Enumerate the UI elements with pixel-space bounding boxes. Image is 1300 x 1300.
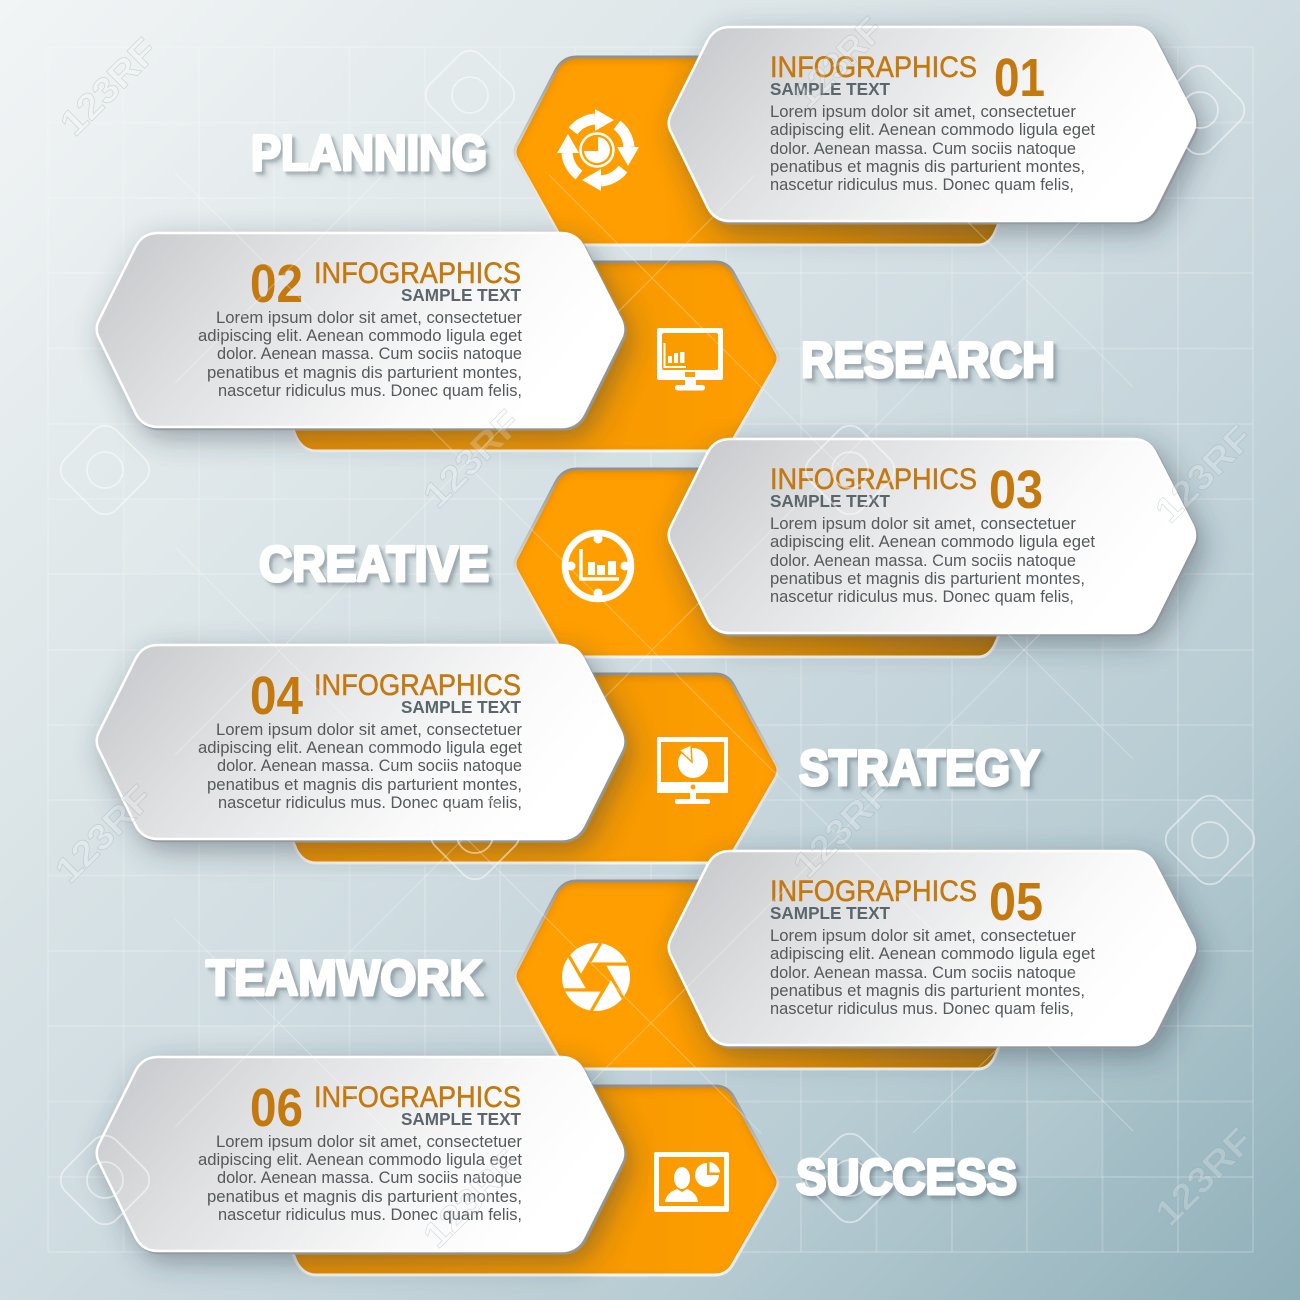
orange tab 5 [515,881,1000,1069]
heading 4: 04 [250,666,303,726]
text block 6: adipiscing elit. Aenean commodo ligula eget [198,1151,522,1169]
step 5: teamwork [206,851,1195,1069]
heading 4 [250,666,521,726]
heading 3: SAMPLE TEXT [770,491,890,511]
text block 3: nascetur ridiculus mus. Donec quam felis, [770,588,1074,606]
heading 5: INFOGRAPHICS [770,875,977,908]
watermark overlay: 123RF [52,30,166,144]
watermark overlay: 123RF [415,402,529,516]
text block 4: dolor. Aenean massa. Cum sociis natoque [217,757,522,775]
step 3: creative [259,439,1195,657]
text block 3: penatibus et magnis dis parturient montes, [770,570,1085,588]
text block 6: nascetur ridiculus mus. Donec quam felis, [218,1206,522,1224]
heading 3: 03 [989,460,1043,520]
text block 5: dolor. Aenean massa. Cum sociis natoque [770,964,1076,982]
heading 2 [250,254,521,314]
orange tab 4 [285,674,778,863]
step 1: planning [251,27,1195,245]
heading 4: INFOGRAPHICS [314,669,521,702]
text block 6 [198,1133,523,1224]
label: creative: CREATIVE [259,536,489,592]
text block 1: adipiscing elit. Aenean commodo ligula eget [770,121,1095,139]
text block 5: Lorem ipsum dolor sit amet, consectetuer [770,927,1077,945]
text block 5: nascetur ridiculus mus. Donec quam felis, [770,1000,1074,1018]
heading 5: 05 [989,872,1043,932]
heading 1: INFOGRAPHICS [770,51,977,84]
heading 5 [770,872,1043,932]
text block 4 [198,721,523,812]
label: teamwork: TEAMWORK [206,950,483,1006]
text block 1: Lorem ipsum dolor sit amet, consectetuer [770,103,1077,121]
heading 3: INFOGRAPHICS [770,463,977,496]
heading 5: SAMPLE TEXT [770,903,890,923]
white panel 3 [669,439,1195,633]
heading 1: SAMPLE TEXT [770,79,890,99]
watermark overlay: 123RF [1147,1120,1261,1234]
heading 6: SAMPLE TEXT [401,1109,521,1129]
step 6: success [97,1057,1017,1275]
icon: cycle arrows [557,109,639,191]
icon: tablet presentation [654,1152,729,1212]
text block 2: nascetur ridiculus mus. Donec quam felis, [218,382,522,400]
orange tab 1 [515,57,1000,245]
heading 3 [770,460,1043,520]
text block 6: dolor. Aenean massa. Cum sociis natoque [217,1169,522,1187]
text block 3: Lorem ipsum dolor sit amet, consectetuer [770,515,1077,533]
label: research: RESEARCH [801,332,1055,388]
white panel 4 [97,645,623,839]
text block 5: adipiscing elit. Aenean commodo ligula eget [770,945,1095,963]
text block 4: adipiscing elit. Aenean commodo ligula eget [198,739,522,757]
text block 5: penatibus et magnis dis parturient montes, [770,982,1085,1000]
watermark overlay: 123RF [415,1142,529,1256]
text block 6: Lorem ipsum dolor sit amet, consectetuer [216,1133,523,1151]
white panel 1 [669,27,1195,221]
watermark overlay: 123RF [1147,417,1261,531]
heading 6: 06 [250,1078,303,1138]
text block 1: nascetur ridiculus mus. Donec quam felis, [770,176,1074,194]
text block 2: Lorem ipsum dolor sit amet, consectetuer [216,309,523,327]
step 4: strategy [97,645,1040,863]
white panel 6 [97,1057,623,1251]
heading 6 [250,1078,521,1138]
icon: aperture [562,943,630,1011]
text block 4: Lorem ipsum dolor sit amet, consectetuer [216,721,523,739]
text block 4: penatibus et magnis dis parturient montes, [207,776,522,794]
label: strategy: STRATEGY [799,740,1040,796]
text block 1 [770,103,1095,194]
heading 1: 01 [994,48,1045,108]
text block 3: adipiscing elit. Aenean commodo ligula eget [770,533,1095,551]
watermark overlay: 123RF [47,777,161,891]
white panel 5 [669,851,1195,1045]
text block 1: dolor. Aenean massa. Cum sociis natoque [770,140,1076,158]
label: planning: PLANNING [251,125,487,181]
heading 2: SAMPLE TEXT [401,285,521,305]
text block 1: penatibus et magnis dis parturient montes, [770,158,1085,176]
white panel 2 [97,233,623,427]
text block 2 [198,309,523,400]
heading 6: INFOGRAPHICS [314,1081,521,1114]
text block 4: nascetur ridiculus mus. Donec quam felis, [218,794,522,812]
heading 2: INFOGRAPHICS [314,257,521,290]
watermark overlay: 123RF [785,9,891,116]
text block 3: dolor. Aenean massa. Cum sociis natoque [770,552,1076,570]
heading 4: SAMPLE TEXT [401,697,521,717]
text block 2: dolor. Aenean massa. Cum sociis natoque [217,345,522,363]
orange tab 2 [285,262,778,451]
icon: monitor with bars [657,328,723,390]
icon: monitor with pie [657,737,728,804]
orange tab 6 [285,1086,778,1275]
text block 6: penatibus et magnis dis parturient montes, [207,1188,522,1206]
icon: target chart [565,533,631,599]
text block 3 [770,515,1095,606]
watermark overlay: 123RF [785,772,899,886]
step 2: research [97,233,1055,451]
orange tab 3 [515,469,1000,657]
text block 2: penatibus et magnis dis parturient montes, [207,364,522,382]
heading 2: 02 [250,254,303,314]
text block 5 [770,927,1095,1018]
text block 2: adipiscing elit. Aenean commodo ligula eget [198,327,522,345]
label: success: SUCCESS [796,1149,1017,1205]
heading 1 [770,48,1045,108]
